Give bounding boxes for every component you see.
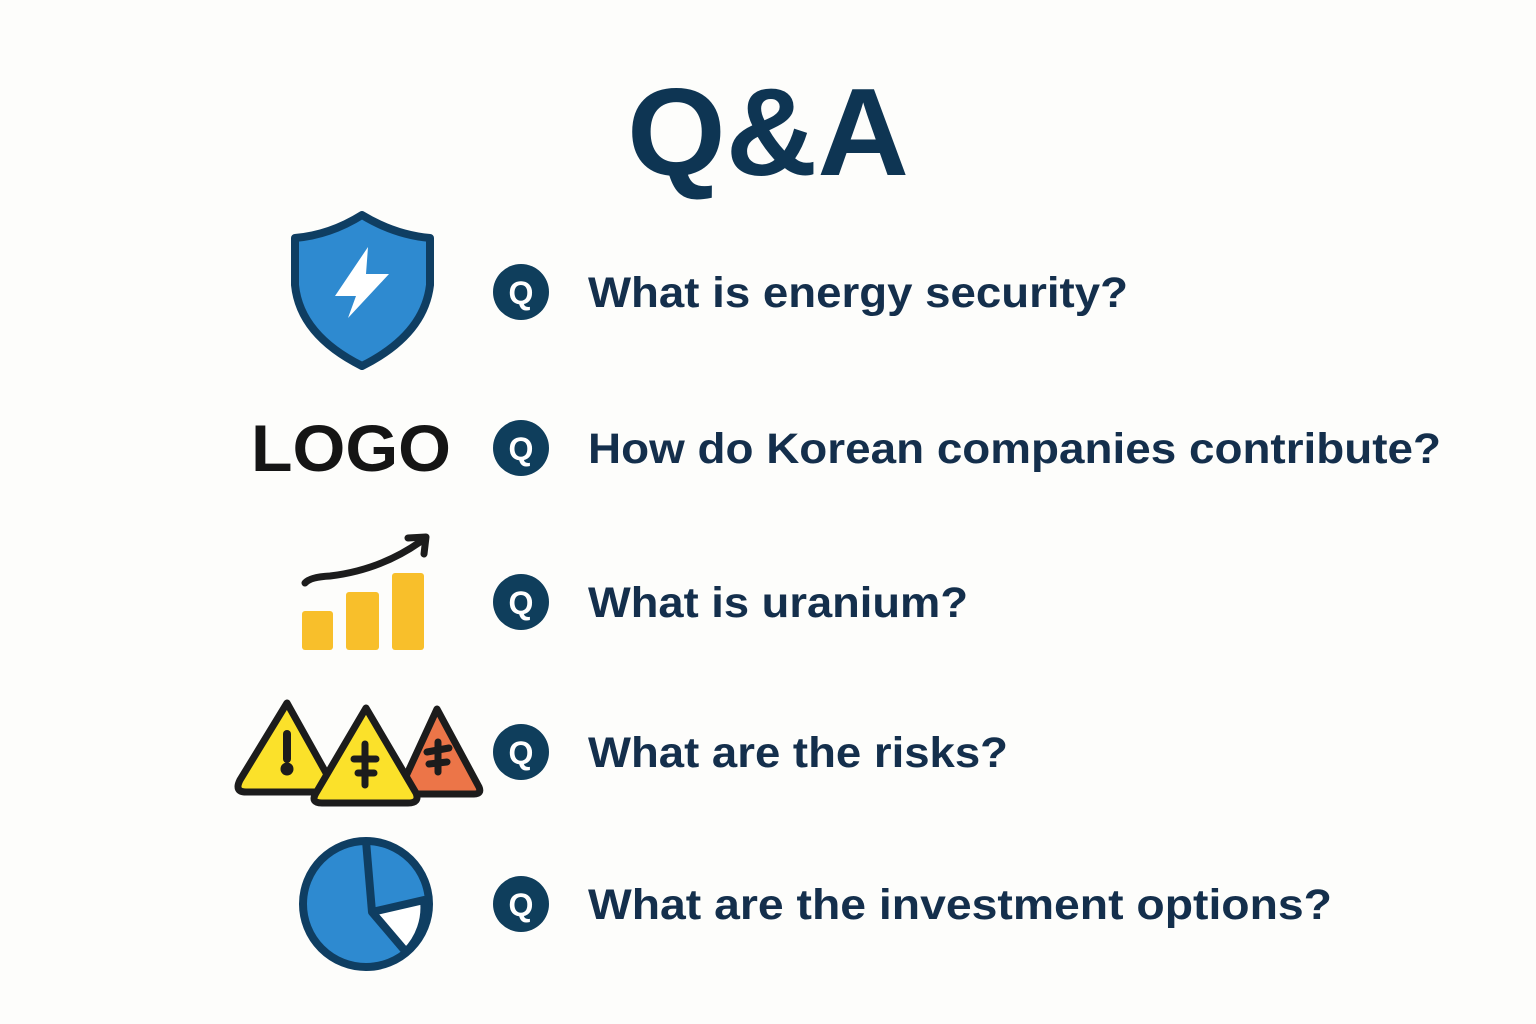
- icon: shield with lightning: [295, 215, 430, 366]
- badge 5: [493, 876, 549, 932]
- badge 3: Q: [509, 585, 533, 621]
- icon: pie chart: [303, 841, 429, 967]
- questions: [588, 269, 1441, 929]
- question 4: What are the risks?: [588, 729, 1008, 777]
- badge 5: Q: [509, 887, 533, 923]
- badge 3: [493, 574, 549, 630]
- badge 2: [493, 420, 549, 476]
- badge 4: Q: [509, 735, 533, 771]
- question 2: How do Korean companies contribute?: [588, 425, 1441, 473]
- icon: LOGO wordmark: LOGO: [251, 411, 451, 485]
- icon: bar chart with rising arrow: [302, 537, 426, 650]
- badge 1: Q: [509, 275, 533, 311]
- Q badges: [493, 264, 549, 932]
- title: Q&A: [627, 64, 909, 202]
- question 1: What is energy security?: [588, 269, 1128, 317]
- badge 1: [493, 264, 549, 320]
- badge 4: [493, 724, 549, 780]
- question 3: What is uranium?: [588, 579, 968, 627]
- icon: warning triangles: [238, 703, 480, 803]
- badge 2: Q: [509, 431, 533, 467]
- question 5: What are the investment options?: [588, 881, 1332, 929]
